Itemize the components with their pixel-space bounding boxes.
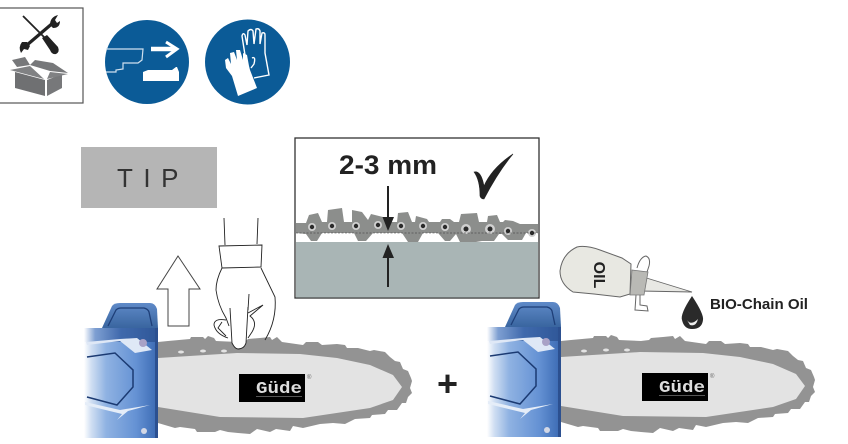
check mark	[474, 154, 513, 199]
arrow: up	[382, 244, 394, 287]
guide bar and chain	[158, 336, 412, 434]
gauge block	[296, 242, 538, 298]
logo plate: Güde	[659, 379, 705, 398]
measure text: 2-3 mm	[339, 150, 437, 180]
icon: oil bottle: OIL	[590, 262, 607, 289]
hand pressing chain	[214, 218, 275, 349]
icon: oil drop	[682, 296, 703, 329]
tip label	[81, 147, 217, 208]
plus sign: +	[437, 363, 458, 404]
icon: tools and box	[0, 8, 83, 103]
motor housing	[487, 302, 561, 437]
saw chain	[296, 208, 538, 242]
logo plate: Güde	[256, 380, 302, 399]
panel: chain gap inset	[295, 138, 539, 298]
oil label: BIO-Chain Oil	[710, 296, 808, 313]
logo plate: ®	[307, 374, 312, 381]
arrow: lift up	[157, 256, 200, 326]
tip label: TIP	[117, 163, 189, 193]
chainsaw left	[84, 303, 412, 438]
motor housing	[84, 303, 158, 438]
icon: oil bottle	[560, 246, 692, 311]
icon: disconnect plug sign	[105, 20, 189, 104]
arrow: down	[382, 186, 394, 231]
chainsaw right	[487, 302, 815, 437]
guide bar and chain	[561, 335, 815, 433]
logo plate: ®	[710, 373, 715, 380]
logo plate	[642, 373, 715, 401]
logo plate	[239, 374, 312, 402]
icon: protective gloves sign	[205, 20, 290, 104]
